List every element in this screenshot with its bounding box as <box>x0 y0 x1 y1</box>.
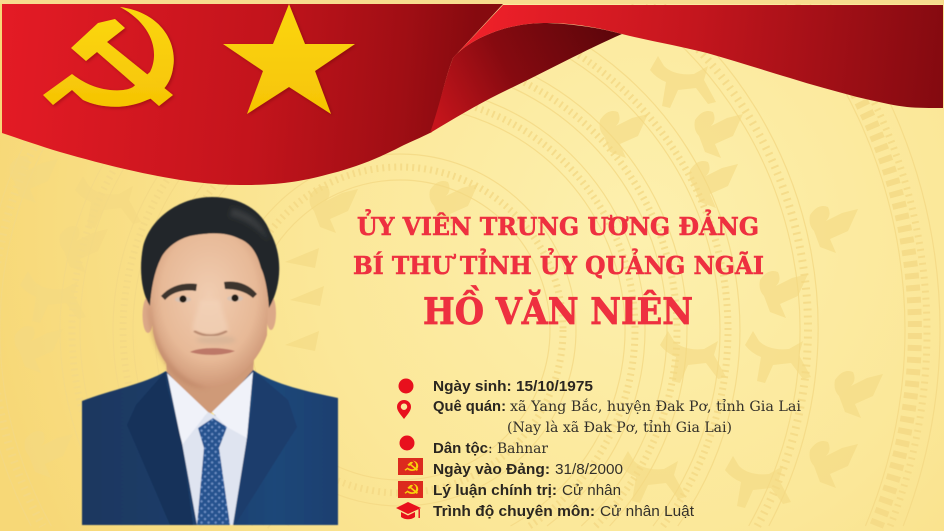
row: professional qualification: Trình độ chuyên môn: <box>433 504 595 520</box>
title <box>353 209 764 333</box>
portrait: mouth <box>190 348 235 355</box>
row: party join date <box>433 462 623 478</box>
info list <box>396 378 802 520</box>
icon: red dot birth date <box>398 378 414 394</box>
row: hometown: xã Yang Bắc, huyện Đak Pơ, tỉnh Gia Lai <box>510 397 802 415</box>
title name: HỒ VĂN NIÊN <box>423 286 693 333</box>
row: hometown: Quê quán: <box>433 399 506 415</box>
portrait: cheek shade <box>148 300 208 388</box>
banner: red flag wave <box>2 4 503 185</box>
portrait: left lapel <box>127 372 193 525</box>
portrait: hair <box>141 197 279 308</box>
icon: yellow star <box>223 4 355 114</box>
portrait: shirt <box>182 412 247 525</box>
banner: red ribbon top right <box>453 5 943 108</box>
icon: location pin <box>397 400 411 419</box>
portrait: right collar <box>212 372 253 438</box>
row: political theory <box>433 483 621 499</box>
row: party join date: Ngày vào Đảng: <box>433 462 550 478</box>
banner: dark ribbon curl <box>430 23 622 133</box>
icon: party flag 2 <box>398 481 423 498</box>
row: professional qualification <box>433 504 694 520</box>
row: professional qualification: Cử nhân Luật <box>600 504 694 520</box>
portrait: face <box>150 228 268 388</box>
portrait: ears <box>142 296 276 333</box>
portrait: tie <box>197 418 230 525</box>
row: hometown note: (Nay là xã Đak Pơ, tỉnh Gia Lai) <box>507 419 732 436</box>
portrait <box>82 197 338 525</box>
row: political theory: Cử nhân <box>562 483 621 499</box>
row: party join date: 31/8/2000 <box>555 462 623 478</box>
icon: party flag 1 <box>398 458 423 475</box>
title line 1: ỦY VIÊN TRUNG ƯƠNG ĐẢNG <box>357 209 759 241</box>
row: ethnicity: Dân tộc <box>433 441 488 457</box>
row: political theory: Lý luận chính trị: <box>433 483 557 499</box>
icon: graduation cap <box>396 502 421 519</box>
portrait: eyes <box>175 294 243 303</box>
title line 2: BÍ THƯ TỈNH ỦY QUẢNG NGÃI <box>353 248 764 280</box>
icon: hammer and sickle <box>43 7 174 107</box>
portrait: left collar <box>167 373 208 445</box>
row: hometown <box>433 397 802 415</box>
row: ethnicity <box>433 441 548 457</box>
icon: red dot ethnicity <box>400 436 414 450</box>
portrait: grey hair highlight <box>230 208 268 240</box>
portrait: moustache shade <box>196 336 236 344</box>
portrait: right lapel <box>235 370 297 525</box>
row: birth date: Ngày sinh: 15/10/1975 <box>433 379 593 395</box>
portrait: neck <box>165 340 255 414</box>
portrait: nose <box>193 300 228 336</box>
row: ethnicity: : Bahnar <box>488 441 548 457</box>
portrait: eyebrows <box>161 282 257 300</box>
portrait: suit <box>82 370 338 525</box>
